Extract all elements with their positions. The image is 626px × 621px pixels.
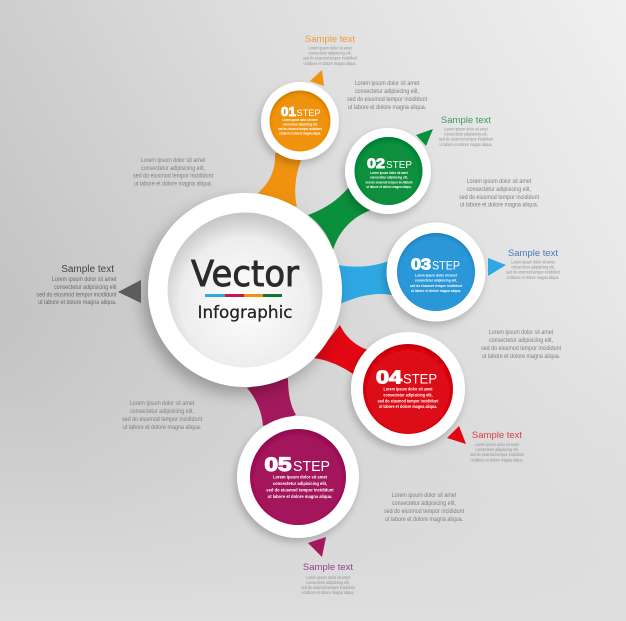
- arrow: green: [416, 129, 433, 146]
- step 2 heading: 02: [367, 155, 385, 171]
- arrow: red: [447, 426, 466, 444]
- label: red sample text: ut labore et dolore magna aliqua.: [471, 457, 523, 463]
- text block: right lower: ut labore et dolore magna aliqua.: [482, 354, 561, 360]
- label: orange sample text: Sample text: [305, 34, 355, 45]
- step 5 circle: [237, 416, 359, 538]
- label: purple sample text: [301, 562, 356, 595]
- label: green sample text: [439, 115, 494, 147]
- arrow: purple: [308, 537, 326, 557]
- text block: bottom left: [122, 401, 202, 431]
- step 5 heading: 05: [264, 455, 292, 476]
- text block: right lower: sed do eiusmod tempor incididunt: [481, 346, 561, 352]
- text block: top left: sed do eiusmod tempor incididunt: [133, 173, 213, 180]
- subtitle: Infographic: Infographic: [198, 303, 292, 323]
- text block: top right: [347, 81, 427, 111]
- step 3 circle: [386, 222, 486, 322]
- step 2 heading: [367, 155, 412, 171]
- label: gray sample text: ut labore et dolore magna aliqua.: [38, 300, 117, 306]
- label: orange sample text: sed do eiusmod tempor incididunt: [303, 55, 358, 61]
- step 1 circle: [261, 82, 339, 160]
- label: green sample text: Lorem ipsum dolor sit amet: [444, 126, 489, 132]
- text block: bottom left: ut labore et dolore magna aliqua.: [123, 425, 202, 431]
- label: purple sample text: sed do eiusmod tempor incididunt: [301, 585, 356, 590]
- text block: top left: [133, 158, 213, 188]
- label: blue sample text: ut labore et dolore magna aliqua.: [507, 275, 559, 280]
- label: green sample text: sed do eiusmod tempor incididunt: [439, 136, 494, 142]
- step 3 heading: STEP: [432, 258, 460, 272]
- step 4 text: consectetur adipisicing elit,: [383, 392, 433, 398]
- step 4 heading: [376, 368, 437, 388]
- step 2 text: [366, 171, 412, 189]
- step 3 text: sed do eiusmod tempor incididunt: [410, 284, 463, 288]
- text block: top left: consectetur adipisicing elit,: [141, 166, 205, 172]
- label: green sample text: Sample text: [441, 115, 491, 126]
- step 5 text: sed do eiusmod tempor incididunt: [266, 487, 334, 493]
- step 2 heading: STEP: [386, 159, 412, 171]
- label: gray sample text: Sample text: [61, 264, 114, 275]
- text block: bottom right: Lorem ipsum dolor sit amet: [392, 493, 457, 499]
- text block: right lower: consectetur adipisicing elit,: [489, 338, 553, 344]
- text block: bottom left: Lorem ipsum dolor sit amet: [130, 401, 195, 407]
- label: red sample text: Sample text: [472, 430, 522, 441]
- step 5 heading: [264, 455, 330, 476]
- step 3 text: [410, 273, 463, 293]
- step 5 text: consectetur adipisicing elit,: [273, 481, 327, 486]
- step 1 text: consectetur adipisicing elit,: [282, 122, 318, 127]
- text block: bottom left: consectetur adipisicing elit,: [130, 409, 194, 415]
- step 3 text: consectetur adipisicing elit,: [415, 278, 457, 283]
- step 2 text: sed do eiusmod tempor incididunt: [366, 180, 412, 184]
- text block: right upper: consectetur adipisicing elit,: [467, 187, 531, 193]
- step 5 text: ut labore et dolore magna aliqua.: [268, 494, 332, 499]
- label: green sample text: consectetur adipisicing elit,: [444, 131, 488, 137]
- text block: right lower: [481, 330, 561, 360]
- step 4 circle: [351, 332, 465, 446]
- step 4 text: [378, 386, 439, 409]
- connector: orange: [258, 153, 304, 207]
- step 4 heading: 04: [376, 368, 402, 388]
- text block: right upper: Lorem ipsum dolor sit amet: [467, 179, 532, 185]
- label: blue sample text: [506, 248, 561, 280]
- label: blue sample text: Lorem ipsum dolor sit amet: [511, 259, 556, 265]
- step 2 text: Lorem ipsum dolor sit amet: [370, 171, 408, 175]
- label: orange sample text: Lorem ipsum dolor sit amet: [308, 45, 353, 51]
- step 1 heading: STEP: [296, 108, 320, 119]
- text block: bottom right: sed do eiusmod tempor incididunt: [384, 509, 464, 515]
- step 3 text: Lorem ipsum dolor sit amet: [415, 273, 458, 278]
- text block: bottom right: consectetur adipisicing elit,: [392, 501, 456, 507]
- arrow: orange: [310, 70, 324, 86]
- label: blue sample text: sed do eiusmod tempor incididunt: [506, 269, 561, 275]
- connector: green: [308, 187, 371, 250]
- label: blue sample text: consectetur adipisicing elit,: [511, 264, 555, 270]
- step 1 heading: [281, 105, 320, 119]
- step 5 text: [266, 474, 334, 499]
- label: red sample text: sed do eiusmod tempor incididunt: [470, 452, 525, 457]
- text block: right upper: [459, 179, 539, 209]
- step 4 heading: STEP: [403, 372, 437, 386]
- label: orange sample text: [303, 34, 358, 66]
- text block: top right: sed do eiusmod tempor incididunt: [347, 97, 427, 103]
- label: orange sample text: ut labore et dolore magna aliqua.: [304, 61, 356, 66]
- text block: bottom right: ut labore et dolore magna aliqua.: [385, 517, 464, 523]
- main circle: [148, 193, 342, 387]
- text block: top left: Lorem ipsum dolor sit amet: [141, 158, 206, 164]
- text block: top left: ut labore et dolore magna aliqua.: [134, 181, 213, 188]
- label: gray sample text: [36, 264, 117, 306]
- step 2 text: consectetur adipisicing elit,: [370, 175, 408, 180]
- label: green sample text: ut labore et dolore magna aliqua.: [440, 142, 492, 147]
- label: gray sample text: sed do eiusmod tempor incididunt: [36, 292, 117, 299]
- step 1 text: [278, 118, 322, 136]
- label: blue sample text: Sample text: [508, 248, 558, 259]
- label: orange sample text: consectetur adipisicing elit,: [308, 50, 352, 56]
- step 4 text: sed do eiusmod tempor incididunt: [378, 398, 439, 404]
- label: purple sample text: ut labore et dolore magna aliqua.: [302, 590, 354, 595]
- text block: top right: ut labore et dolore magna aliqua.: [348, 105, 427, 111]
- step 1 text: Lorem ipsum dolor sit amet: [282, 118, 318, 122]
- step 3 heading: [411, 256, 460, 274]
- text block: right lower: Lorem ipsum dolor sit amet: [489, 330, 554, 336]
- text block: top right: Lorem ipsum dolor sit amet: [355, 81, 420, 87]
- label: red sample text: [470, 430, 525, 463]
- step 3 heading: 03: [411, 256, 431, 274]
- text block: bottom left: sed do eiusmod tempor incididunt: [122, 417, 202, 423]
- label: purple sample text: Lorem ipsum dolor sit amet: [306, 575, 351, 580]
- text block: top right: consectetur adipisicing elit,: [355, 89, 419, 95]
- step 1 text: sed do eiusmod tempor incididunt: [278, 127, 322, 131]
- step 5 text: Lorem ipsum dolor sit amet: [273, 474, 328, 480]
- connector: red: [314, 325, 368, 376]
- step 2 text: ut labore et dolore magna aliqua.: [366, 185, 412, 189]
- step 2 circle: [345, 128, 431, 214]
- text block: right upper: ut labore et dolore magna aliqua.: [460, 202, 539, 209]
- connector: purple: [247, 378, 296, 426]
- label: gray sample text: Lorem ipsum dolor sit amet: [52, 277, 117, 283]
- step 1 heading: 01: [281, 105, 296, 119]
- label: gray sample text: consectetur adipisicing elit: [54, 285, 117, 291]
- arrow: blue: [488, 258, 506, 276]
- label: red sample text: Lorem ipsum dolor sit amet: [475, 442, 520, 447]
- label: purple sample text: consectetur adipisicing elit,: [306, 580, 350, 585]
- connector: blue: [338, 261, 392, 304]
- step 3 text: ut labore et dolore magna aliqua.: [411, 289, 461, 293]
- step 5 heading: STEP: [293, 459, 330, 475]
- label: purple sample text: Sample text: [303, 562, 353, 573]
- step 4 text: ut labore et dolore magna aliqua.: [379, 404, 437, 409]
- title: Vector: Vector: [191, 254, 299, 295]
- step 1 text: ut labore et dolore magna aliqua.: [279, 131, 321, 136]
- label: red sample text: consectetur adipisicing elit,: [475, 447, 519, 452]
- step 4 text: Lorem ipsum dolor sit amet: [384, 386, 433, 392]
- text block: bottom right: [384, 493, 464, 523]
- colour bar: [205, 294, 282, 297]
- text block: right upper: sed do eiusmod tempor incididunt: [459, 195, 539, 201]
- arrow: gray: [118, 280, 141, 303]
